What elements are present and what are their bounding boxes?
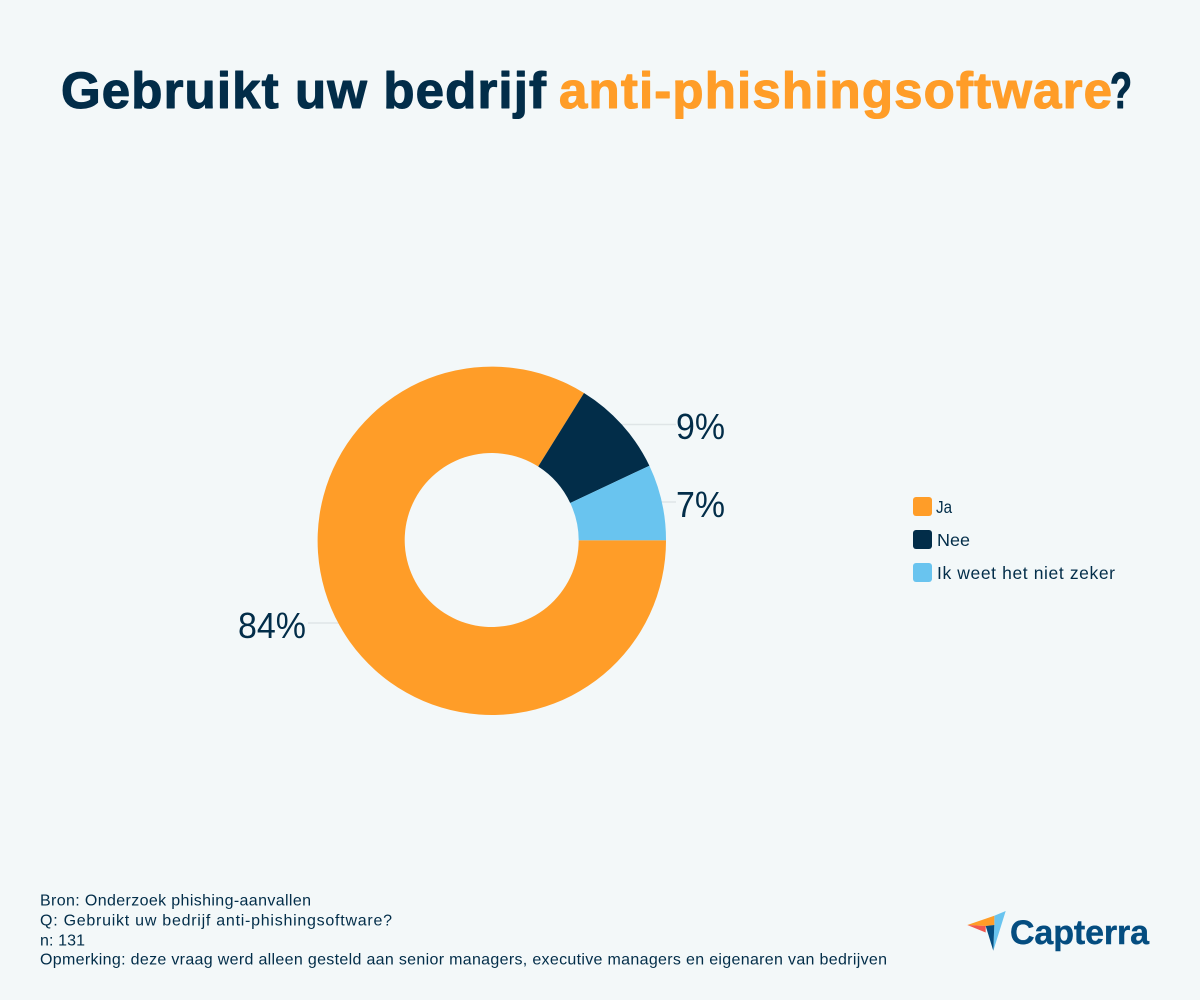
value labels: 7%: [676, 484, 725, 525]
legend: Nee: [937, 530, 970, 550]
source notes: Q: Gebruikt uw bedrijf anti-phishingsoftware?: [40, 912, 392, 930]
slice: Ja 84%: [318, 367, 666, 715]
legend: Ik weet het niet zeker: [937, 563, 1115, 583]
value labels: 84%: [238, 605, 306, 646]
source notes: Bron: Onderzoek phishing-aanvallen: [40, 892, 311, 910]
source notes: n: 131: [40, 932, 85, 950]
slice: Nee 9%: [538, 393, 649, 503]
value labels: 9%: [676, 406, 725, 447]
donut chart: [238, 367, 725, 715]
title: anti-phishingsoftware: [559, 62, 1112, 119]
leader lines: [308, 424, 676, 623]
title: ?: [1110, 62, 1132, 119]
title: [61, 62, 1132, 119]
legend: Ja: [936, 497, 952, 517]
title: Gebruikt uw bedrijf: [61, 62, 547, 119]
slice: Ik weet het niet zeker 7%: [570, 466, 666, 540]
source notes: [40, 892, 887, 968]
logo: Capterra: Capterra: [1010, 914, 1150, 952]
value labels: [238, 406, 725, 646]
legend: [913, 497, 1115, 583]
source notes: Opmerking: deze vraag werd alleen gesteld aan senior managers, executive managers en eigenaren van bedrijven: [40, 952, 887, 968]
